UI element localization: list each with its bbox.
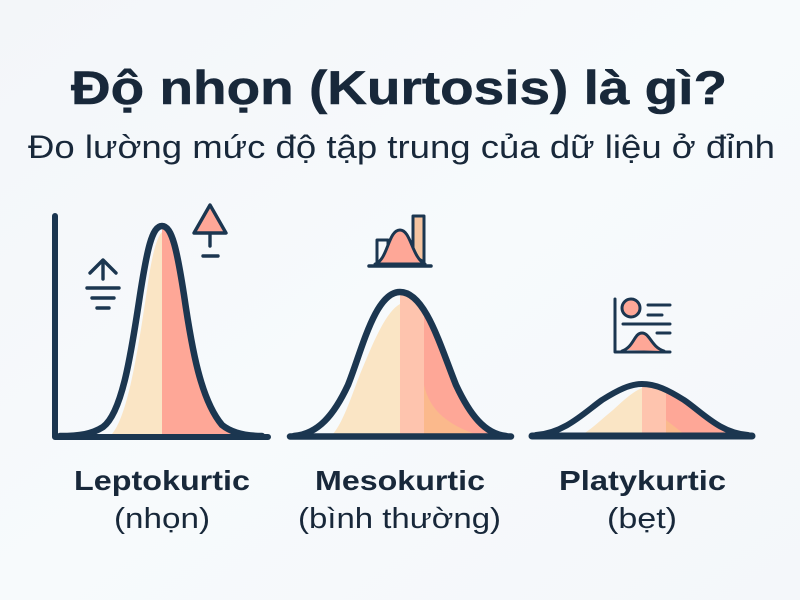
icon: small bell and bars	[369, 216, 431, 266]
label: leptokurtic	[74, 465, 250, 535]
panel: leptokurtic	[55, 205, 268, 437]
icon: triangle up arrow	[194, 205, 226, 256]
panel: platykurtic	[532, 299, 756, 440]
label: mesokurtic: (bình thường)	[298, 503, 501, 535]
subtitle: Đo lường mức độ tập trung của dữ liệu ở đỉnh	[28, 129, 775, 165]
label: mesokurtic	[298, 465, 501, 535]
icon: arrow up with lines	[87, 260, 119, 308]
panel: mesokurtic	[290, 216, 514, 440]
label: mesokurtic: Mesokurtic	[315, 465, 485, 496]
label: platykurtic: (bẹt)	[607, 503, 677, 535]
label: leptokurtic: (nhọn)	[114, 503, 210, 535]
label: leptokurtic: Leptokurtic	[74, 465, 250, 496]
infographic canvas	[28, 68, 773, 534]
title: Độ nhọn (Kurtosis) là gì?	[71, 61, 727, 114]
chart: mesokurtic curve	[290, 280, 514, 440]
chart: platykurtic curve	[532, 380, 756, 440]
chart: leptokurtic curve	[55, 216, 268, 437]
label: platykurtic: Platykurtic	[559, 465, 726, 496]
icon: data card	[615, 299, 670, 352]
label: platykurtic	[559, 465, 726, 535]
